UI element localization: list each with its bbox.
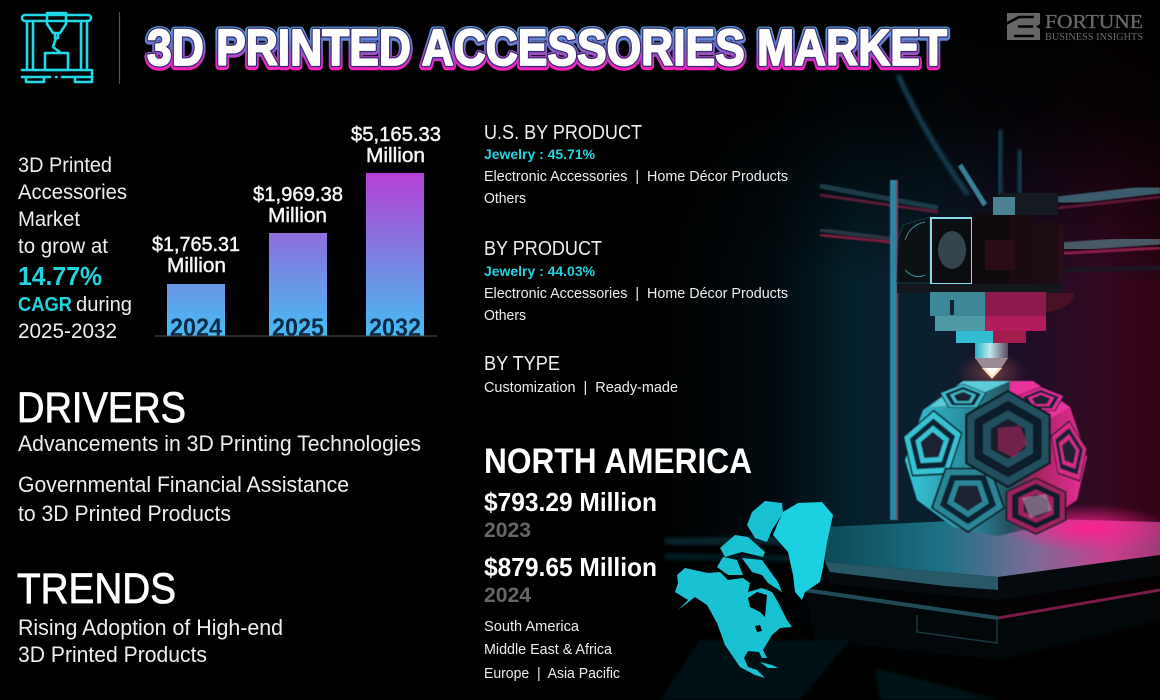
text block: CAGR summary: 3D Printed: [18, 154, 112, 177]
segment: by product: Jewelry : 44.03%: [484, 263, 596, 279]
bar 2025: 2025: [272, 314, 324, 342]
segment: by product: Electronic Accessories | Home Décor Products: [484, 285, 788, 302]
trends: Rising Adoption of High-end: [18, 615, 283, 640]
logo: Fortune Business Insights: FORTUNE: [1045, 11, 1143, 33]
logo: Fortune Business Insights: [1006, 11, 1143, 43]
printed polyhedron: [893, 381, 1092, 536]
header divider: [118, 12, 120, 84]
regional: North America: 2023: [484, 519, 531, 542]
bar 2032: Million: [366, 145, 425, 167]
title: 3D PRINTED ACCESSORIES MARKET: [147, 19, 947, 76]
drivers: DRIVERS: [17, 384, 186, 432]
segment: by type: Customization | Ready-made: [484, 379, 678, 396]
map: North America: [675, 501, 833, 678]
bar 2025: [253, 184, 343, 342]
trends: 3D Printed Products: [18, 642, 207, 667]
photo: 3D printer printing a polyhedral accessory: [600, 0, 1160, 700]
text block: CAGR summary: during: [76, 294, 132, 316]
bar 2025: Million: [268, 205, 327, 227]
segment: U.S. by product: Others: [484, 190, 526, 207]
trends: TRENDS: [17, 565, 176, 613]
segment: by type: [484, 353, 678, 396]
regional: North America: $793.29 Million: [484, 487, 657, 517]
regional: North America: Middle East & Africa: [484, 641, 613, 658]
regional: North America: $879.65 Million: [484, 552, 657, 582]
bed: [660, 504, 1160, 700]
segment: by product: BY PRODUCT: [484, 238, 602, 260]
text block: CAGR summary: 14.77%: [18, 261, 102, 291]
bar 2032: $5,165.33: [351, 124, 441, 146]
segment: by product: [484, 238, 788, 324]
text block: CAGR summary: Accessories: [18, 181, 127, 204]
segment: U.S. by product: Jewelry : 45.71%: [484, 146, 596, 162]
trends: [17, 565, 283, 667]
nozzle: [956, 343, 1028, 392]
text block: CAGR summary: to grow at: [18, 235, 108, 258]
bar 2032: [351, 124, 441, 342]
title: 3D PRINTED ACCESSORIES MARKET: [147, 20, 947, 77]
text block: CAGR summary: Market: [18, 208, 80, 231]
print head: [897, 193, 1075, 343]
title: 3D PRINTED ACCESSORIES MARKET: [147, 19, 947, 76]
segment: by product: Others: [484, 307, 526, 324]
drivers: [17, 384, 421, 526]
header icon: 3D printer: [22, 13, 92, 82]
segment: U.S. by product: U.S. BY PRODUCT: [484, 122, 642, 144]
text block: CAGR summary: CAGR: [18, 294, 73, 316]
bar 2024: $1,765.31: [152, 234, 240, 256]
regional: North America: South America: [484, 618, 580, 635]
logo: Fortune Business Insights: BUSINESS INSIGHTS: [1045, 32, 1143, 43]
regional: North America: Europe | Asia Pacific: [484, 665, 620, 682]
bar 2024: 2024: [170, 314, 222, 342]
regional: North America: NORTH AMERICA: [484, 442, 752, 481]
segment: U.S. by product: Electronic Accessories | Home Décor Products: [484, 168, 788, 185]
bar 2032: 2032: [369, 314, 421, 342]
drivers: Governmental Financial Assistance: [18, 472, 349, 497]
bar 2024: [152, 234, 240, 342]
bar 2024: Million: [167, 255, 226, 277]
segment: U.S. by product: [484, 122, 788, 207]
text block: CAGR summary: [18, 154, 132, 343]
regional: North America: 2024: [484, 584, 531, 607]
bar 2025: $1,969.38: [253, 184, 343, 206]
bar chart: market size: [152, 124, 441, 342]
drivers: to 3D Printed Products: [18, 501, 231, 526]
drivers: Advancements in 3D Printing Technologies: [18, 431, 421, 456]
regional: North America: [484, 442, 752, 682]
text block: CAGR summary: 2025-2032: [18, 320, 117, 343]
segment: by type: BY TYPE: [484, 353, 560, 375]
